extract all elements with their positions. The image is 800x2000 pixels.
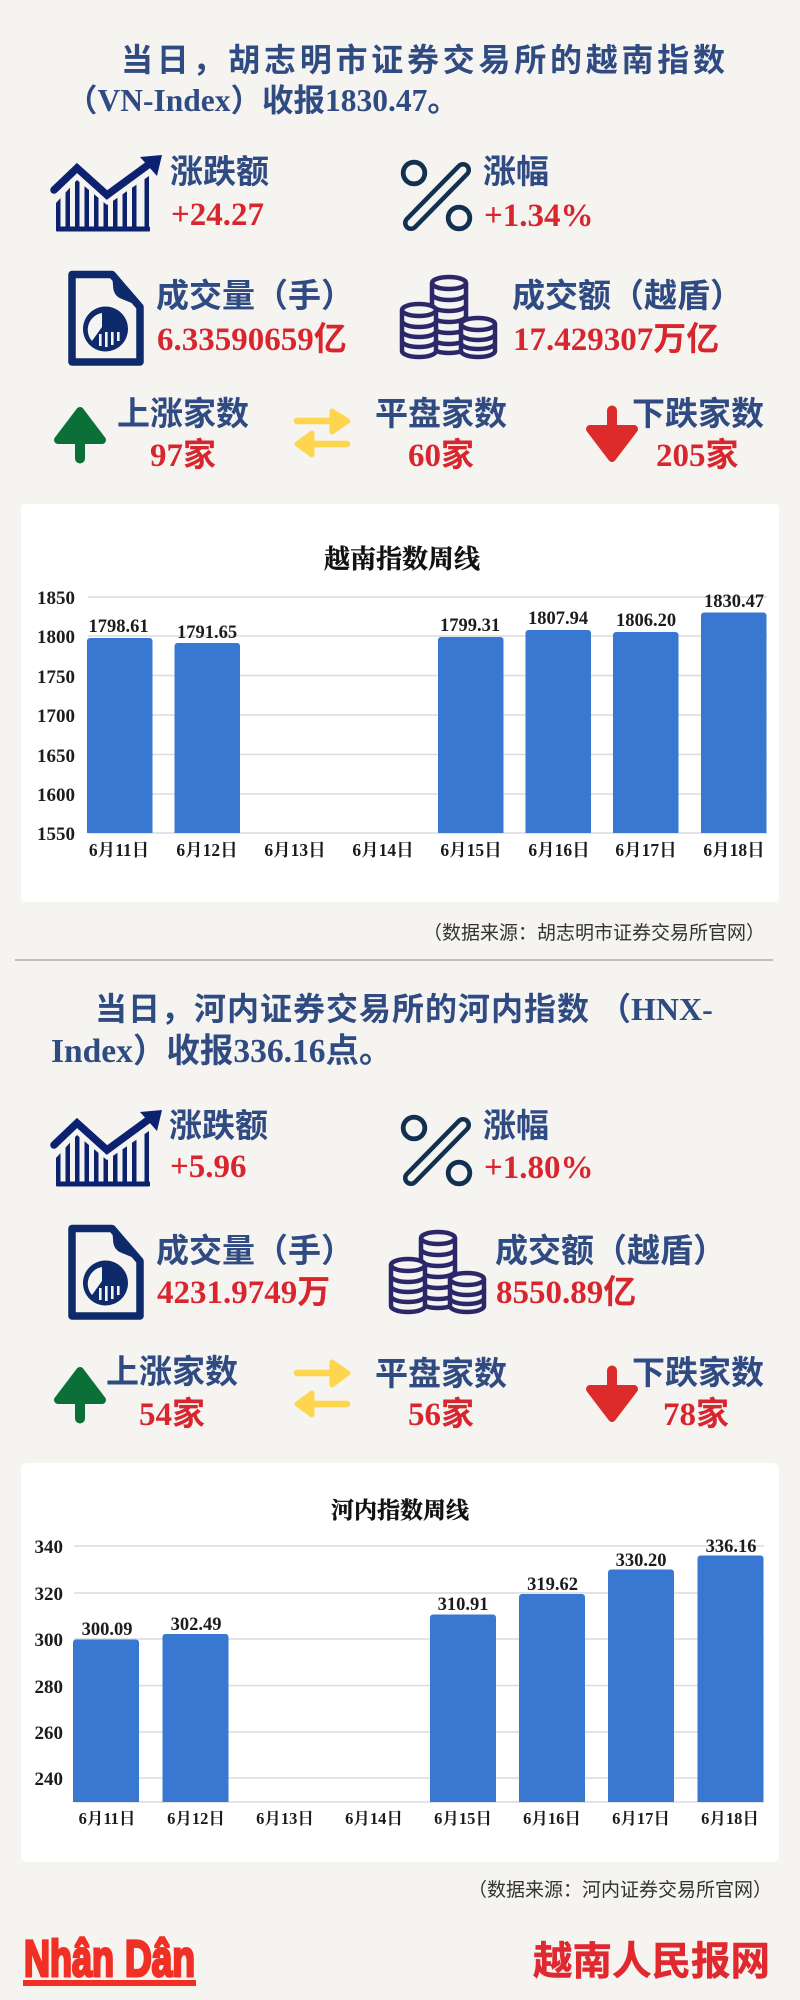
bar chart: VN-Index: 1850 <box>37 588 75 609</box>
stat: volume: 成交量（手） <box>156 269 354 317</box>
bar chart: VN-Index: 1799.31 <box>440 616 500 636</box>
bar chart: VN-Index: 1791.65 <box>177 623 237 643</box>
bar chart: VN-Index: 1600 <box>37 785 75 806</box>
stat: change amount <box>54 145 269 233</box>
stat: advancers: 上涨家数 <box>117 387 249 435</box>
icon: rising chart <box>54 155 162 232</box>
stat: change percent: 涨幅 <box>483 145 549 193</box>
chart title: 河内指数周线 <box>331 1492 469 1525</box>
bar chart: VN-Index: 6月17日 <box>615 840 677 860</box>
stat: decliners: 下跌家数 <box>632 1346 764 1394</box>
icon: coin stacks <box>391 1232 484 1312</box>
bar chart: HNX-Index: 6月15日 <box>434 1809 492 1828</box>
stat: turnover <box>402 269 743 358</box>
stat: unchanged: 平盘家数 <box>375 387 507 435</box>
stat: volume: 6.33590659亿 <box>157 321 347 358</box>
stat: turnover: 8550.89亿 <box>496 1274 636 1311</box>
stat: turnover: 成交额（越盾） <box>512 269 743 317</box>
footer: Nhan Dan logo: Dân <box>125 1930 195 1987</box>
stat: decliners: 78家 <box>663 1396 729 1433</box>
section: VN-Index <box>21 42 779 945</box>
bar chart: HNX-Index: 300.09 <box>82 1620 132 1640</box>
stat: change percent: 涨幅 <box>483 1099 549 1147</box>
bar chart: VN-Index: 6月18日 <box>703 840 765 860</box>
stat: change amount: +5.96 <box>170 1149 247 1185</box>
bar chart: VN-Index: 1800 <box>37 627 75 648</box>
source note: （数据来源：胡志明市证券交易所官网） <box>423 918 765 945</box>
bar chart: HNX-Index: 340 <box>34 1537 63 1558</box>
panel: HNX-Index weekly chart <box>21 1463 779 1862</box>
icon: yellow swap arrows <box>297 411 348 455</box>
stat: advancers <box>58 1345 238 1433</box>
heading: VN-Index close <box>66 42 729 118</box>
panel: VN-Index weekly chart <box>21 504 779 902</box>
icon: green up arrow <box>58 411 102 458</box>
icon: document with pie chart <box>72 273 142 362</box>
bar chart: VN-Index <box>37 588 767 860</box>
stat: unchanged: 56家 <box>408 1396 474 1433</box>
bar chart: HNX-Index: 319.62 <box>527 1575 578 1595</box>
bar chart: HNX-Index: 6月17日 <box>612 1809 670 1828</box>
bar chart: VN-Index: 6月15日 <box>440 840 502 860</box>
icon: green up arrow <box>58 1371 102 1418</box>
bar chart: VN-Index: 1650 <box>37 746 75 767</box>
bar chart: HNX-Index <box>34 1537 764 1828</box>
bar chart: HNX-Index: 320 <box>34 1584 63 1605</box>
stat: unchanged: 60家 <box>408 437 474 474</box>
icon: red down arrow <box>590 410 634 458</box>
chart title: 越南指数周线 <box>324 539 480 576</box>
icon: yellow swap arrows <box>297 1362 348 1415</box>
bar chart: VN-Index: 6月13日 <box>264 840 326 860</box>
source note: （数据来源：河内证券交易所官网） <box>468 1875 772 1902</box>
bar chart: HNX-Index: 280 <box>34 1677 63 1698</box>
bar chart: VN-Index: 1806.20 <box>616 611 676 631</box>
stat: decliners: 下跌家数 <box>632 387 764 435</box>
bar chart: VN-Index: 1700 <box>37 706 75 727</box>
bar chart: VN-Index: 6月12日 <box>176 840 238 860</box>
bar chart: VN-Index: 6月11日 <box>89 840 149 860</box>
bar chart: HNX-Index: 6月18日 <box>701 1809 759 1828</box>
heading: VN-Index close: 当日，胡志明市证券交易所的越南指数 <box>121 42 729 78</box>
bar chart: HNX-Index: 336.16 <box>706 1537 756 1557</box>
bar chart: VN-Index: 1798.61 <box>88 617 149 637</box>
stat: volume: 成交量（手） <box>156 1224 354 1272</box>
stat: change percent <box>403 145 594 234</box>
footer: Vietnamese People's Daily Chinese name: 越南人民报网 <box>533 1930 770 1987</box>
stat: advancers <box>58 387 249 474</box>
stat: change amount: +24.27 <box>171 197 264 233</box>
stat: change amount: 涨跌额 <box>170 145 269 193</box>
heading: VN-Index close: （VN-Index）收报1830.47。 <box>66 83 459 118</box>
stat: unchanged <box>297 1347 507 1433</box>
stat: advancers: 54家 <box>139 1396 205 1433</box>
stat: decliners <box>590 1346 764 1433</box>
stat: volume: 4231.9749万 <box>157 1275 330 1311</box>
section: HNX-Index <box>21 991 779 1902</box>
stat: advancers: 上涨家数 <box>106 1345 238 1393</box>
icon: document with pie chart <box>72 1227 142 1316</box>
bar chart: HNX-Index: 6月11日 <box>79 1809 135 1828</box>
bar chart: VN-Index: 1807.94 <box>528 609 588 629</box>
heading: HNX-Index close <box>51 991 713 1070</box>
stat: volume <box>72 1224 354 1316</box>
icon: rising chart <box>54 1110 162 1186</box>
stat: change amount: 涨跌额 <box>169 1099 268 1147</box>
bar chart: VN-Index: 6月14日 <box>352 840 414 860</box>
stat: decliners: 205家 <box>656 437 738 474</box>
stat: turnover: 17.429307万亿 <box>513 321 719 358</box>
bar chart: HNX-Index: 260 <box>34 1723 63 1744</box>
icon: red down arrow <box>590 1370 634 1418</box>
bar chart: HNX-Index: 6月12日 <box>167 1809 225 1828</box>
bar chart: HNX-Index: 6月16日 <box>523 1809 581 1828</box>
stat: turnover <box>391 1224 726 1312</box>
stat: change percent: +1.80% <box>484 1150 594 1186</box>
stat: unchanged: 平盘家数 <box>375 1347 507 1395</box>
stat: advancers: 97家 <box>150 437 216 474</box>
icon: coin stacks <box>402 277 495 357</box>
stat: change percent <box>403 1099 594 1186</box>
bar chart: HNX-Index: 240 <box>34 1769 63 1790</box>
stat: turnover: 成交额（越盾） <box>495 1224 726 1272</box>
stat: change percent: +1.34% <box>484 198 594 234</box>
footer: Nhan Dan logo: Nhân <box>24 1930 114 1987</box>
stat: change amount <box>54 1099 268 1186</box>
stat: volume <box>72 269 354 362</box>
bar chart: VN-Index: 1750 <box>37 667 75 688</box>
bar chart: VN-Index: 1550 <box>37 824 75 845</box>
heading: HNX-Index close: 当日，河内证券交易所的河内指数 （HNX- <box>95 991 713 1027</box>
stat: unchanged <box>297 387 507 474</box>
icon: percent sign <box>403 1117 470 1184</box>
heading: HNX-Index close: Index）收报336.16点。 <box>51 1033 393 1070</box>
bar chart: HNX-Index: 330.20 <box>616 1551 666 1571</box>
bar chart: HNX-Index: 6月14日 <box>345 1809 403 1828</box>
stat: decliners <box>590 387 764 474</box>
bar chart: HNX-Index: 6月13日 <box>256 1809 314 1828</box>
bar chart: HNX-Index: 302.49 <box>171 1615 221 1635</box>
bar chart: VN-Index: 1830.47 <box>704 592 764 612</box>
icon: percent sign <box>403 162 470 229</box>
bar chart: HNX-Index: 300 <box>34 1630 63 1651</box>
bar chart: HNX-Index: 310.91 <box>438 1595 488 1615</box>
bar chart: VN-Index: 6月16日 <box>528 840 590 860</box>
